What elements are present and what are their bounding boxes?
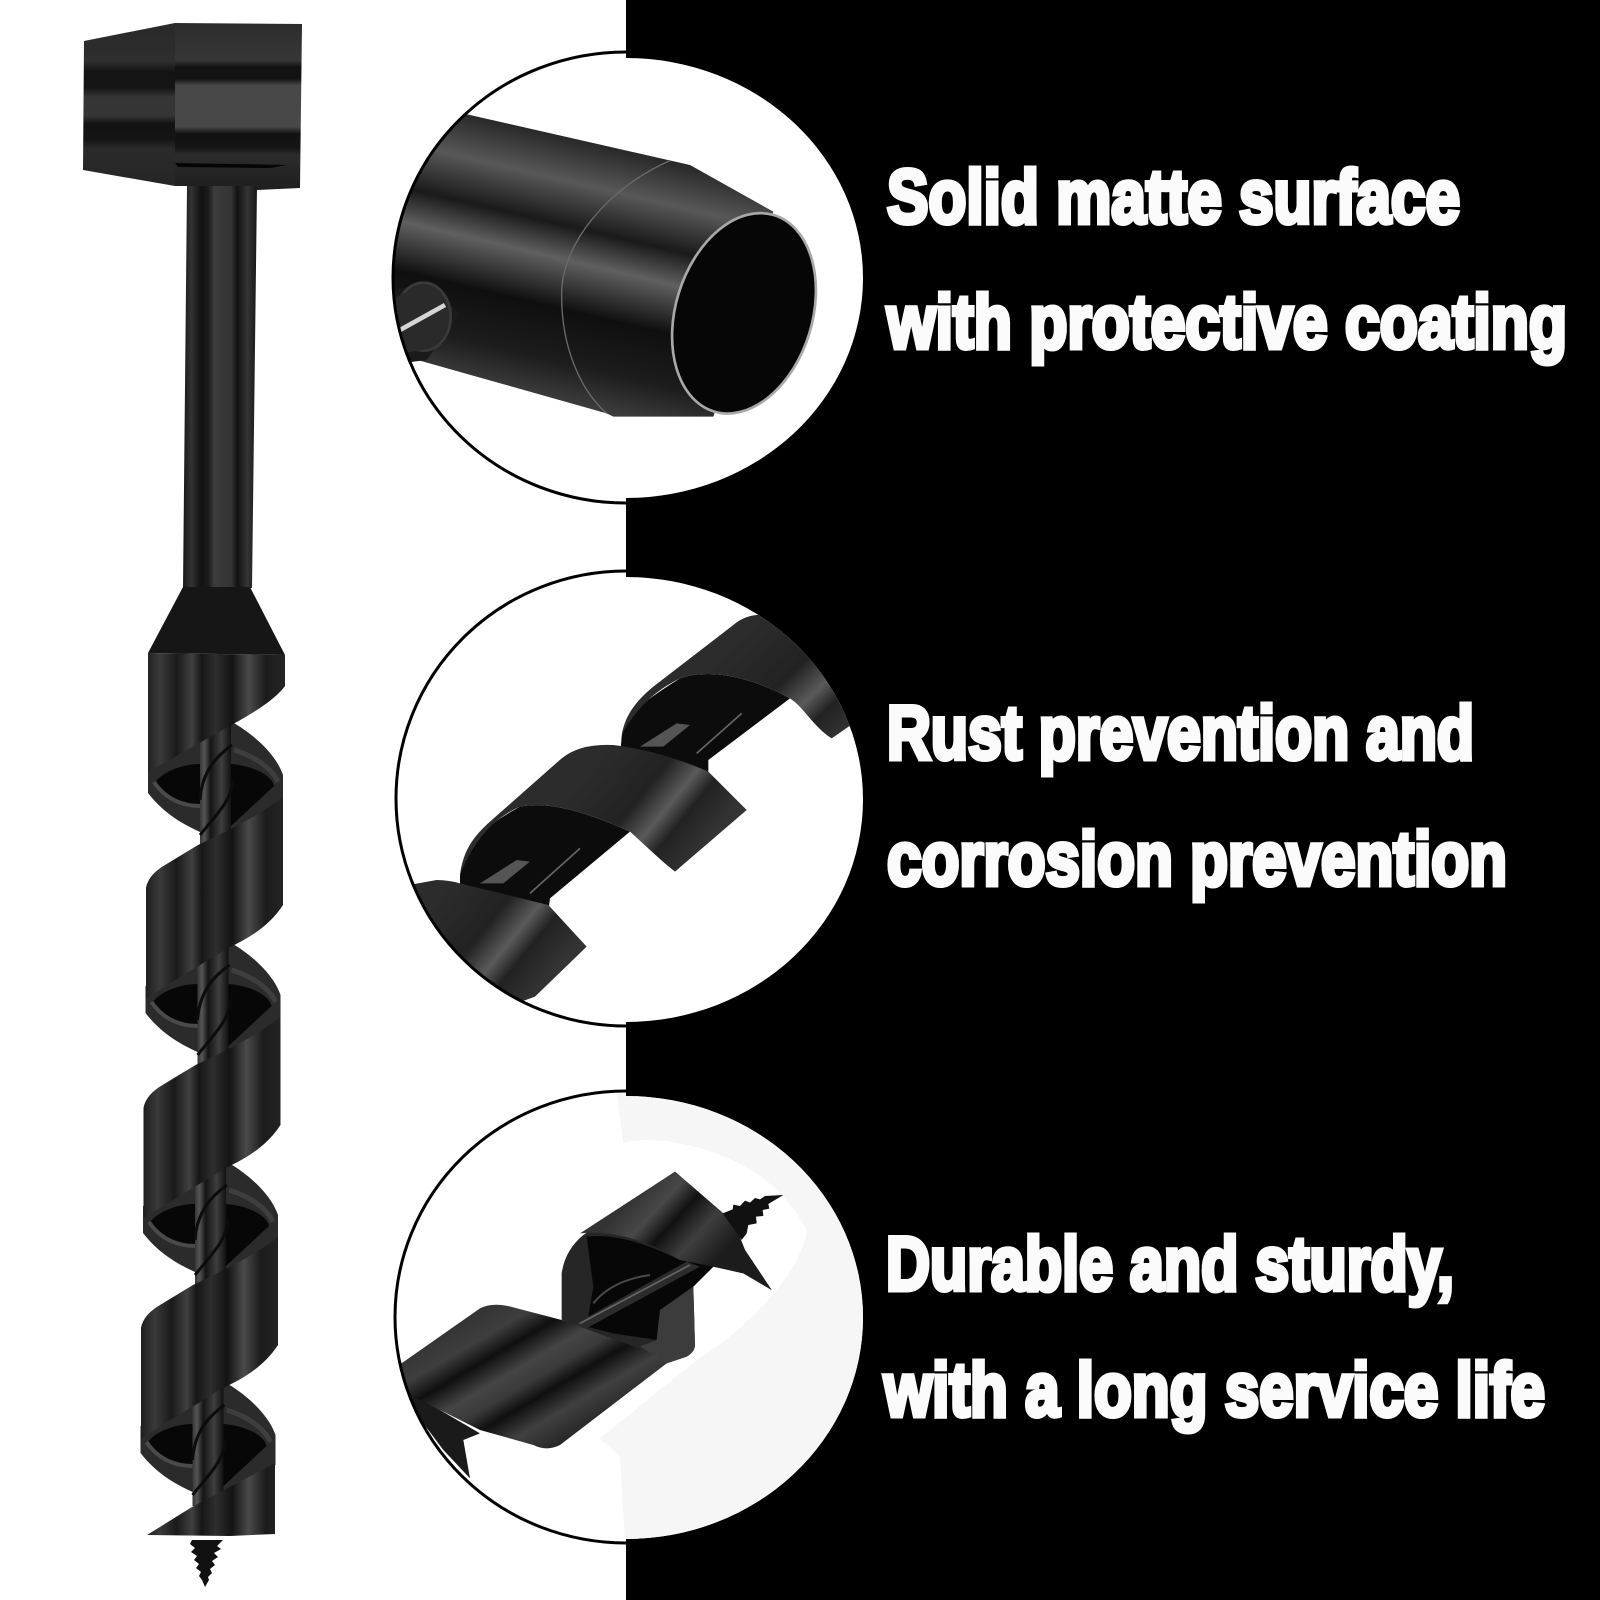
main flute band — [402, 1304, 666, 1448]
disc outline — [393, 52, 626, 503]
black right background — [626, 0, 1600, 1600]
disc outline — [396, 571, 626, 1026]
line: solid matte surface: Solid matte surface — [887, 155, 1460, 240]
flute silhouette — [562, 1172, 772, 1363]
detail circle 3: screw tip close-up — [363, 1091, 867, 1543]
handle shaft — [183, 186, 257, 588]
collar flute band — [148, 653, 285, 772]
cutting band and spur — [147, 1463, 275, 1536]
white disc — [396, 571, 863, 1026]
screw tip — [190, 1540, 223, 1587]
disc content: spur and flutes — [363, 1093, 867, 1543]
feature text 2 — [887, 691, 1507, 902]
upper flute band — [580, 1172, 772, 1290]
hammer head right barrel — [175, 23, 302, 190]
product: auger drill with T-handle head — [83, 23, 302, 1587]
central web — [586, 1262, 700, 1327]
disc content: flutes — [400, 615, 853, 1017]
screw tip — [723, 1195, 783, 1240]
spiral core unit 2 — [146, 942, 280, 1066]
slot under head — [175, 163, 287, 168]
lower spur behind band — [411, 1396, 480, 1478]
tapered collar — [148, 587, 285, 655]
hammer head left cone — [83, 23, 175, 186]
detail circle 1: head close-up — [347, 52, 863, 503]
line: durable and sturdy: Durable and sturdy, — [886, 1222, 1454, 1307]
white left background — [0, 0, 626, 1600]
feature text 1 — [886, 155, 1567, 365]
flute band 2 — [144, 1017, 280, 1218]
spiral core unit 4 — [140, 1382, 276, 1506]
spiral core unit 3 — [143, 1162, 278, 1286]
disc outline — [395, 1091, 626, 1543]
white disc — [395, 1091, 863, 1543]
flute band 1 — [146, 797, 283, 998]
spiral core unit 1 — [148, 722, 283, 846]
feature text 3 — [883, 1222, 1545, 1433]
white disc — [393, 52, 863, 503]
flute band 3 — [141, 1237, 278, 1438]
disc content: tube — [394, 114, 818, 417]
off-white halo area — [600, 1093, 867, 1543]
right flange — [640, 1287, 695, 1363]
hollow — [587, 1236, 713, 1340]
detail circle 2: flutes close-up — [396, 571, 863, 1026]
